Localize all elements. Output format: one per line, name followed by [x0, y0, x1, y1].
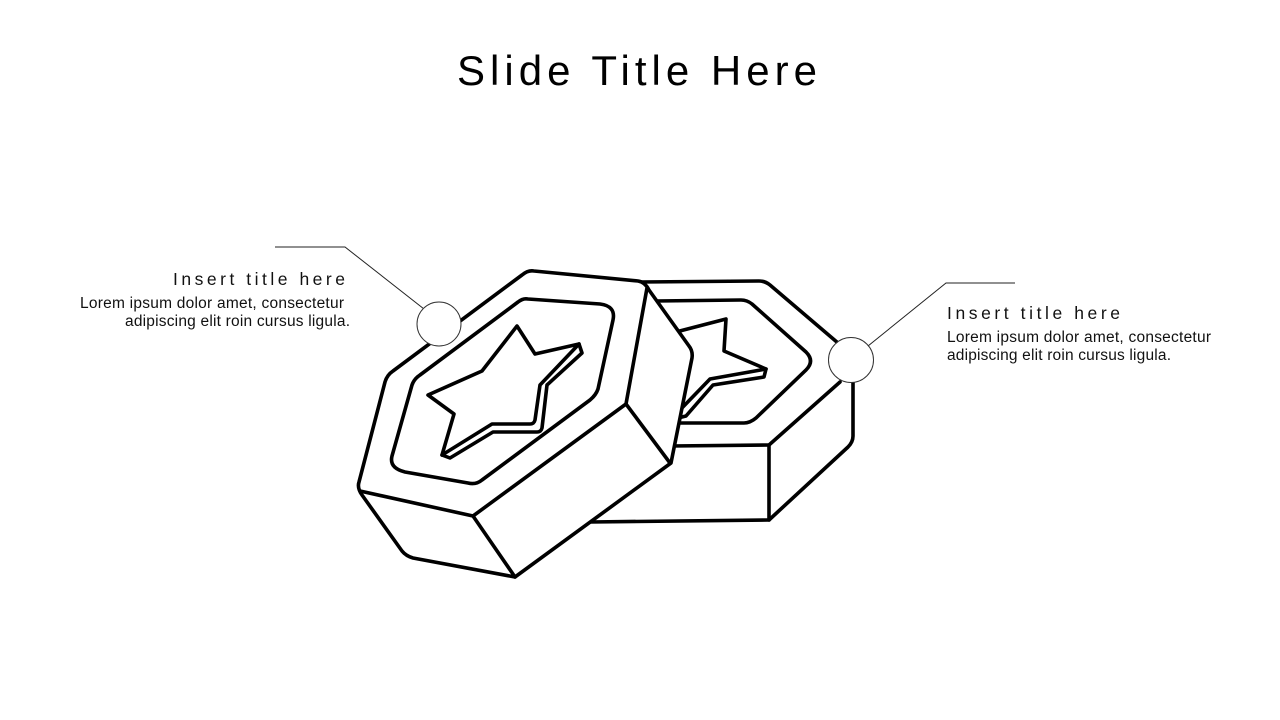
right callout text: adipiscing elit roin cursus ligula.	[947, 347, 1171, 364]
left callout text: adipiscing elit roin cursus ligula.	[125, 313, 350, 330]
left callout text	[80, 295, 350, 330]
illustration: two hexagonal star tokens	[358, 271, 853, 577]
right callout heading: Insert title here	[947, 303, 1120, 323]
left callout	[80, 247, 461, 346]
left marker circle	[417, 302, 461, 346]
front hexagon token	[358, 271, 692, 577]
title: Slide Title Here	[457, 47, 817, 94]
left leader line	[275, 247, 424, 309]
back star	[672, 319, 766, 410]
right callout	[828, 283, 1211, 382]
right callout text: Lorem ipsum dolor amet, consectetur	[947, 329, 1211, 346]
front star	[428, 326, 579, 455]
back hexagon token	[590, 281, 853, 522]
right marker circle	[828, 338, 874, 382]
left callout heading: Insert title here	[173, 269, 345, 289]
right callout text	[947, 329, 1211, 364]
left callout text: Lorem ipsum dolor amet, consectetur	[80, 295, 344, 312]
right leader line	[868, 283, 1015, 346]
